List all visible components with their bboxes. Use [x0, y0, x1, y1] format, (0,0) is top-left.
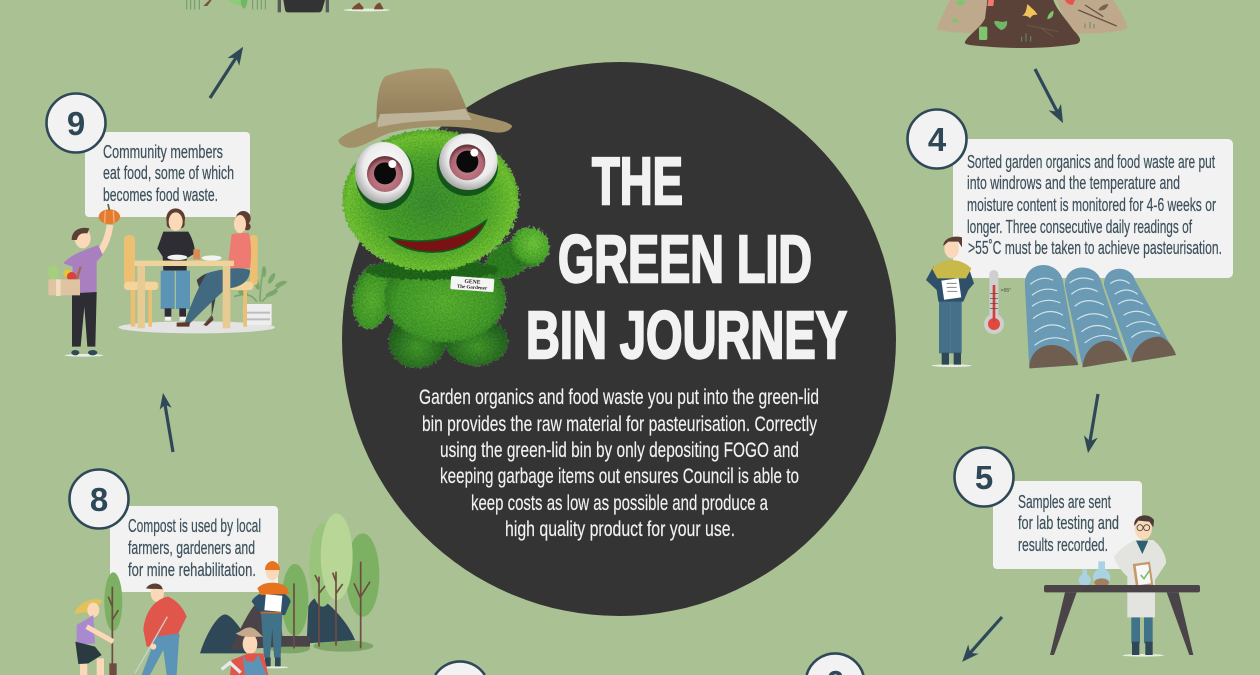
arrow: step 9 to step 1 — [204, 43, 249, 102]
step 5 number badge: 5 — [975, 459, 993, 496]
intro paragraph: high quality product for your use. — [505, 518, 735, 541]
step 5 illustration: scientist at lab table — [1044, 515, 1200, 657]
step 2 illustration remains (cropped at top) — [187, 0, 390, 12]
step 8 — [70, 470, 379, 675]
title — [526, 144, 847, 373]
mascot: Gene the Gardener — [338, 68, 549, 368]
mascot mouth — [390, 221, 486, 252]
intro paragraph: Garden organics and food waste you put into the green-lid — [419, 386, 819, 409]
windrows — [1025, 265, 1176, 368]
worker — [926, 237, 974, 367]
step 5 text box: for lab testing and — [1018, 513, 1119, 533]
step 9 text box: becomes food waste. — [103, 185, 218, 205]
step 5 — [954, 448, 1200, 657]
step 8 text box — [110, 506, 278, 592]
step 4 number badge: 4 — [928, 121, 947, 158]
lab table — [1044, 585, 1200, 655]
step 4 — [908, 110, 1233, 368]
arrow: step 8 to step 9 — [157, 392, 179, 453]
mascot hat — [338, 68, 512, 148]
mascot eyes — [355, 133, 498, 210]
arrow: step 5 to step 6 — [957, 612, 1007, 667]
step 8 text box: farmers, gardeners and — [128, 538, 255, 558]
step 9 text box: eat food, some of which — [103, 163, 234, 183]
step 4 illustration: worker, thermometer and compost windrows — [926, 237, 1176, 368]
arrow: step 3 to step 4 — [1029, 66, 1069, 126]
mascot name badge: GENE — [464, 279, 481, 286]
step 7 number badge (cropped at bottom) — [435, 661, 485, 675]
title: BIN JOURNEY — [526, 298, 847, 373]
mascot furry body — [342, 129, 549, 368]
step 9 illustration: family eating at table — [47, 204, 287, 357]
step 8 illustration: trees and mounds background — [200, 513, 379, 653]
step 8 number badge: 8 — [90, 481, 108, 518]
intro paragraph: keep costs as low as possible and produce a — [471, 492, 768, 515]
step 4 number badge — [908, 110, 966, 168]
step 8 text box: Compost is used by local — [128, 516, 261, 536]
intro paragraph: keeping garbage items out ensures Council is able to — [440, 465, 799, 488]
step 3 compost heap (cropped at top) — [937, 0, 1127, 48]
step 9 number badge — [46, 94, 106, 152]
step 5 text box: Samples are sent — [1018, 492, 1111, 512]
intro paragraph — [419, 386, 819, 541]
step 9 text box — [85, 132, 250, 217]
mascot name badge — [450, 276, 494, 292]
step 5 text box — [993, 481, 1142, 569]
step 5 text box: results recorded. — [1018, 535, 1108, 555]
step 9 — [46, 94, 287, 357]
step 4 text box — [953, 139, 1233, 278]
title: THE — [592, 144, 683, 219]
arrow: step 4 to step 5 — [1081, 393, 1105, 454]
intro paragraph: bin provides the raw material for pasteurisation. Correctly — [422, 413, 817, 436]
step 8 illustration: people planting — [74, 561, 291, 675]
thermometer: >55° — [1001, 288, 1011, 294]
step 9 text box: Community members — [103, 142, 223, 162]
step 5 number badge — [954, 448, 1014, 506]
central dark circle — [342, 62, 896, 616]
step 6 number badge (cropped at bottom) — [807, 653, 863, 675]
thermometer — [984, 270, 1011, 334]
mascot name badge: The Gardener — [457, 285, 488, 292]
step 8 text box: for mine rehabilitation. — [128, 560, 256, 580]
step 8 number badge — [70, 470, 128, 528]
title: GREEN LID — [558, 222, 812, 297]
intro paragraph: using the green-lid bin by only depositing FOGO and — [440, 439, 799, 462]
step 9 number badge: 9 — [67, 105, 85, 142]
